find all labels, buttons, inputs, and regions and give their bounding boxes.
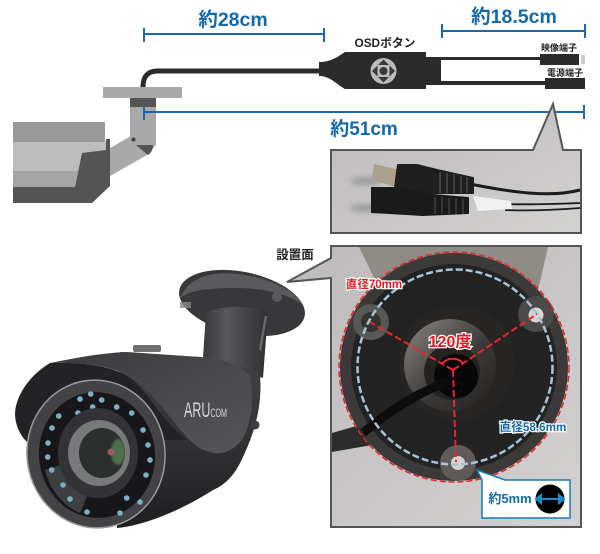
- camera: hood underside: [15, 363, 187, 442]
- photo: cables: [470, 184, 580, 210]
- camera: neck: [203, 307, 268, 378]
- photo: power connector: [372, 188, 468, 215]
- diagram: side-view camera illustration: [13, 87, 182, 203]
- icon: OSD button: [370, 58, 396, 84]
- guide: 70mm circle: [339, 252, 569, 482]
- dimension: 51cm: 約51cm: [330, 118, 398, 140]
- camera: hood top surface: [50, 352, 252, 453]
- panel: mounting surface detail: [287, 246, 581, 527]
- photo: arm behind: [359, 247, 548, 290]
- callout: 5mm hole: [477, 470, 570, 518]
- label: diameter 58.6mm: 直径58.6mm: [500, 420, 566, 434]
- guide: 120 degree lines: [370, 314, 537, 462]
- label: video connector: 映像端子: [541, 42, 577, 53]
- panel: connector photo: [331, 104, 581, 233]
- label: power connector: 電源端子: [547, 67, 583, 78]
- dimension: 28cm: [144, 9, 324, 42]
- label: mounting surface: 設置面: [276, 248, 314, 262]
- camera: mount plate: [173, 259, 311, 347]
- camera: lower body: [117, 352, 260, 528]
- photo: mounting plate: [340, 253, 568, 481]
- diagram: cable with OSD module and connectors: [143, 52, 585, 89]
- camera: LEDs: [45, 391, 153, 516]
- label: OSD button: OSDボタン: [355, 36, 416, 50]
- camera: lens: [58, 408, 138, 498]
- dimension: 28cm: 約28cm: [198, 9, 268, 31]
- dimension: 18.5cm: [442, 6, 585, 38]
- dimension: 18.5cm: 約18.5cm: [471, 6, 557, 28]
- label: 120 degrees: 120度: [429, 332, 471, 351]
- camera: front ring: [17, 371, 175, 537]
- camera: top knob: [133, 345, 161, 352]
- dimension: 51cm: [144, 105, 584, 140]
- guide: 58.6mm circle: [358, 270, 552, 464]
- label: diameter 70mm: 直径70mm: [346, 277, 402, 291]
- photo: BNC connector: [372, 164, 473, 193]
- camera: brand: ARUCOM: [184, 399, 227, 422]
- photo: bullet camera: [15, 259, 311, 537]
- photo: white label: [473, 196, 512, 211]
- callout: 5mm hole: 約5mm: [488, 491, 532, 506]
